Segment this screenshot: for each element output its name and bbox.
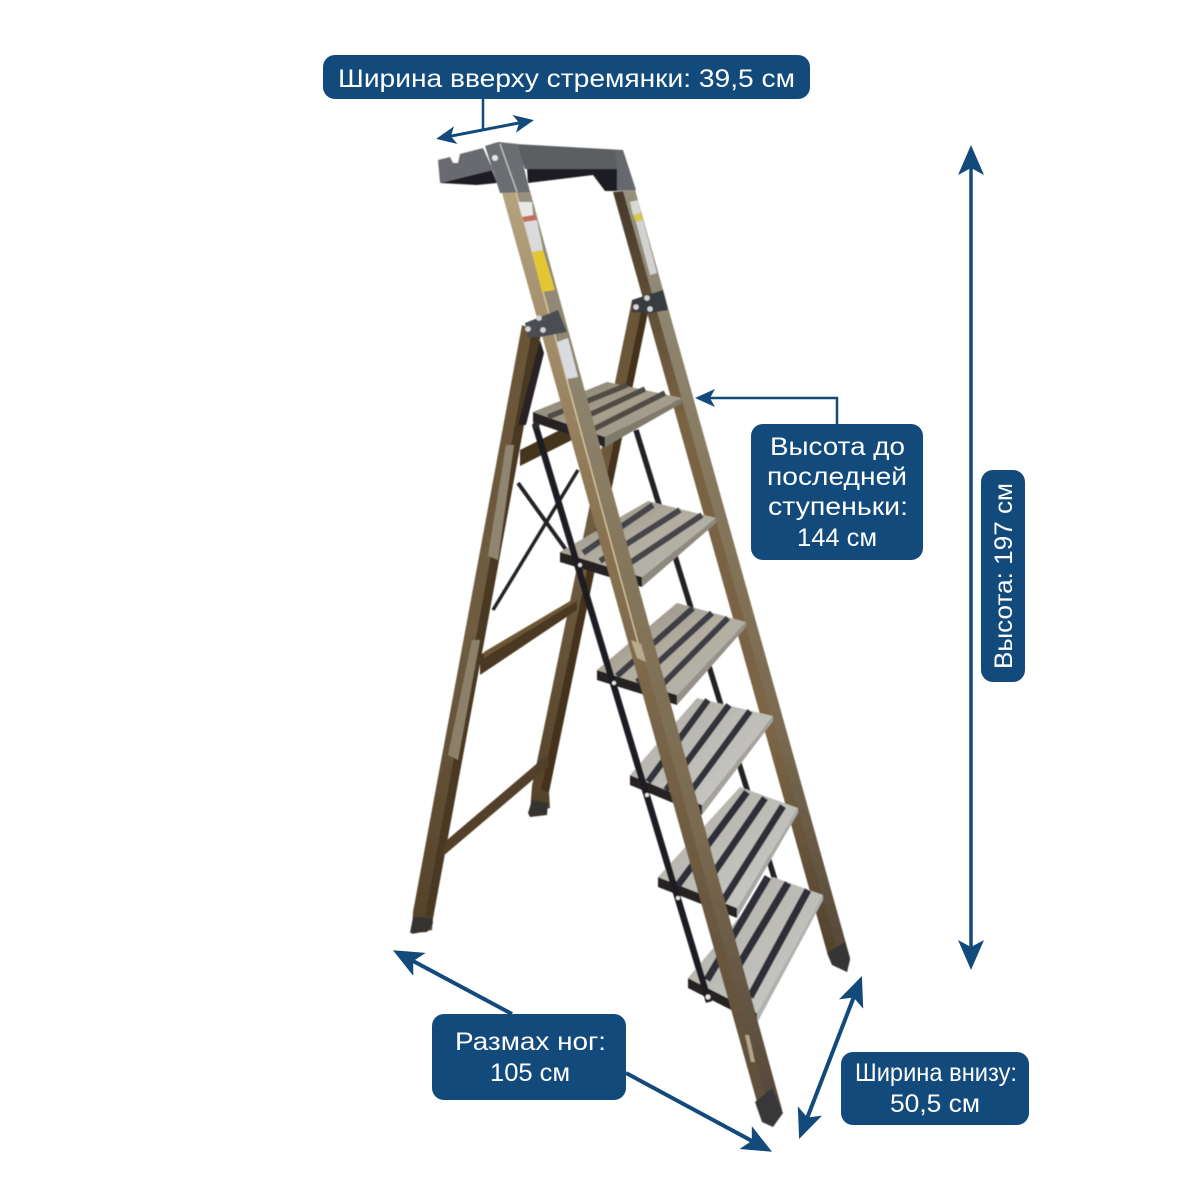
step 4 xyxy=(630,698,773,815)
label: leg span: Размах ног: xyxy=(455,1028,606,1056)
step 6 xyxy=(688,877,823,1023)
label: bottom width xyxy=(841,1052,1029,1125)
step 3 xyxy=(597,603,746,705)
tray top bar xyxy=(515,144,623,169)
label: leg span: 105 см xyxy=(490,1059,570,1087)
left bracket with bolts xyxy=(525,310,567,337)
tray left cap xyxy=(485,142,530,193)
rear left leg xyxy=(412,325,541,934)
stepladder illustration xyxy=(410,142,850,1127)
arrow: total height xyxy=(969,153,973,962)
rear right foot xyxy=(528,800,548,817)
arrow: leg span lower xyxy=(626,1073,765,1148)
label: bottom width: Ширина внизу: xyxy=(855,1059,1017,1087)
right rail stickers xyxy=(630,200,657,275)
brown cross brace upper xyxy=(480,597,577,675)
label: leg span xyxy=(432,1014,626,1100)
label: bottom width: 50,5 см xyxy=(890,1090,980,1118)
arrow: bottom width xyxy=(802,984,859,1132)
label: total height xyxy=(981,470,1025,682)
rear right leg xyxy=(530,300,648,812)
label: height to last step: ступеньки: xyxy=(768,493,908,521)
arrow: height to last step xyxy=(701,398,837,424)
label: height to last step: Высота до xyxy=(770,433,905,461)
front rail foot xyxy=(755,1088,783,1127)
label: height to last step: 144 см xyxy=(797,524,877,552)
dark shadow under rear left leg xyxy=(518,340,544,425)
label: top width: Ширина вверху стремянки: 39,5 см xyxy=(338,65,795,93)
brown cross brace lower xyxy=(442,755,549,857)
arrow: top width xyxy=(442,99,528,138)
front left rail xyxy=(502,191,782,1125)
label: height to last step xyxy=(751,424,923,560)
step 2 xyxy=(560,501,716,587)
front black strut with bolts xyxy=(532,422,710,1002)
step 1 xyxy=(533,382,682,447)
arrow: leg span upper xyxy=(400,954,512,1014)
left rail stickers xyxy=(518,202,578,379)
right bracket with bolts xyxy=(632,290,668,313)
label: height to last step: последней xyxy=(767,463,907,491)
step 5 xyxy=(658,787,798,918)
brown bracket under top step xyxy=(520,426,572,466)
right rail foot xyxy=(827,942,850,972)
rear black strut right xyxy=(636,430,775,880)
label: total height: Высота: 197 см xyxy=(990,483,1018,669)
rear left foot xyxy=(410,917,433,933)
label: top width xyxy=(323,55,810,99)
tray left shelf with hook xyxy=(438,148,493,183)
top tray xyxy=(438,142,636,193)
black cross struts xyxy=(493,470,582,610)
right front rail xyxy=(613,190,850,972)
tray right cap xyxy=(615,150,636,191)
tray underside shadow xyxy=(440,168,617,191)
